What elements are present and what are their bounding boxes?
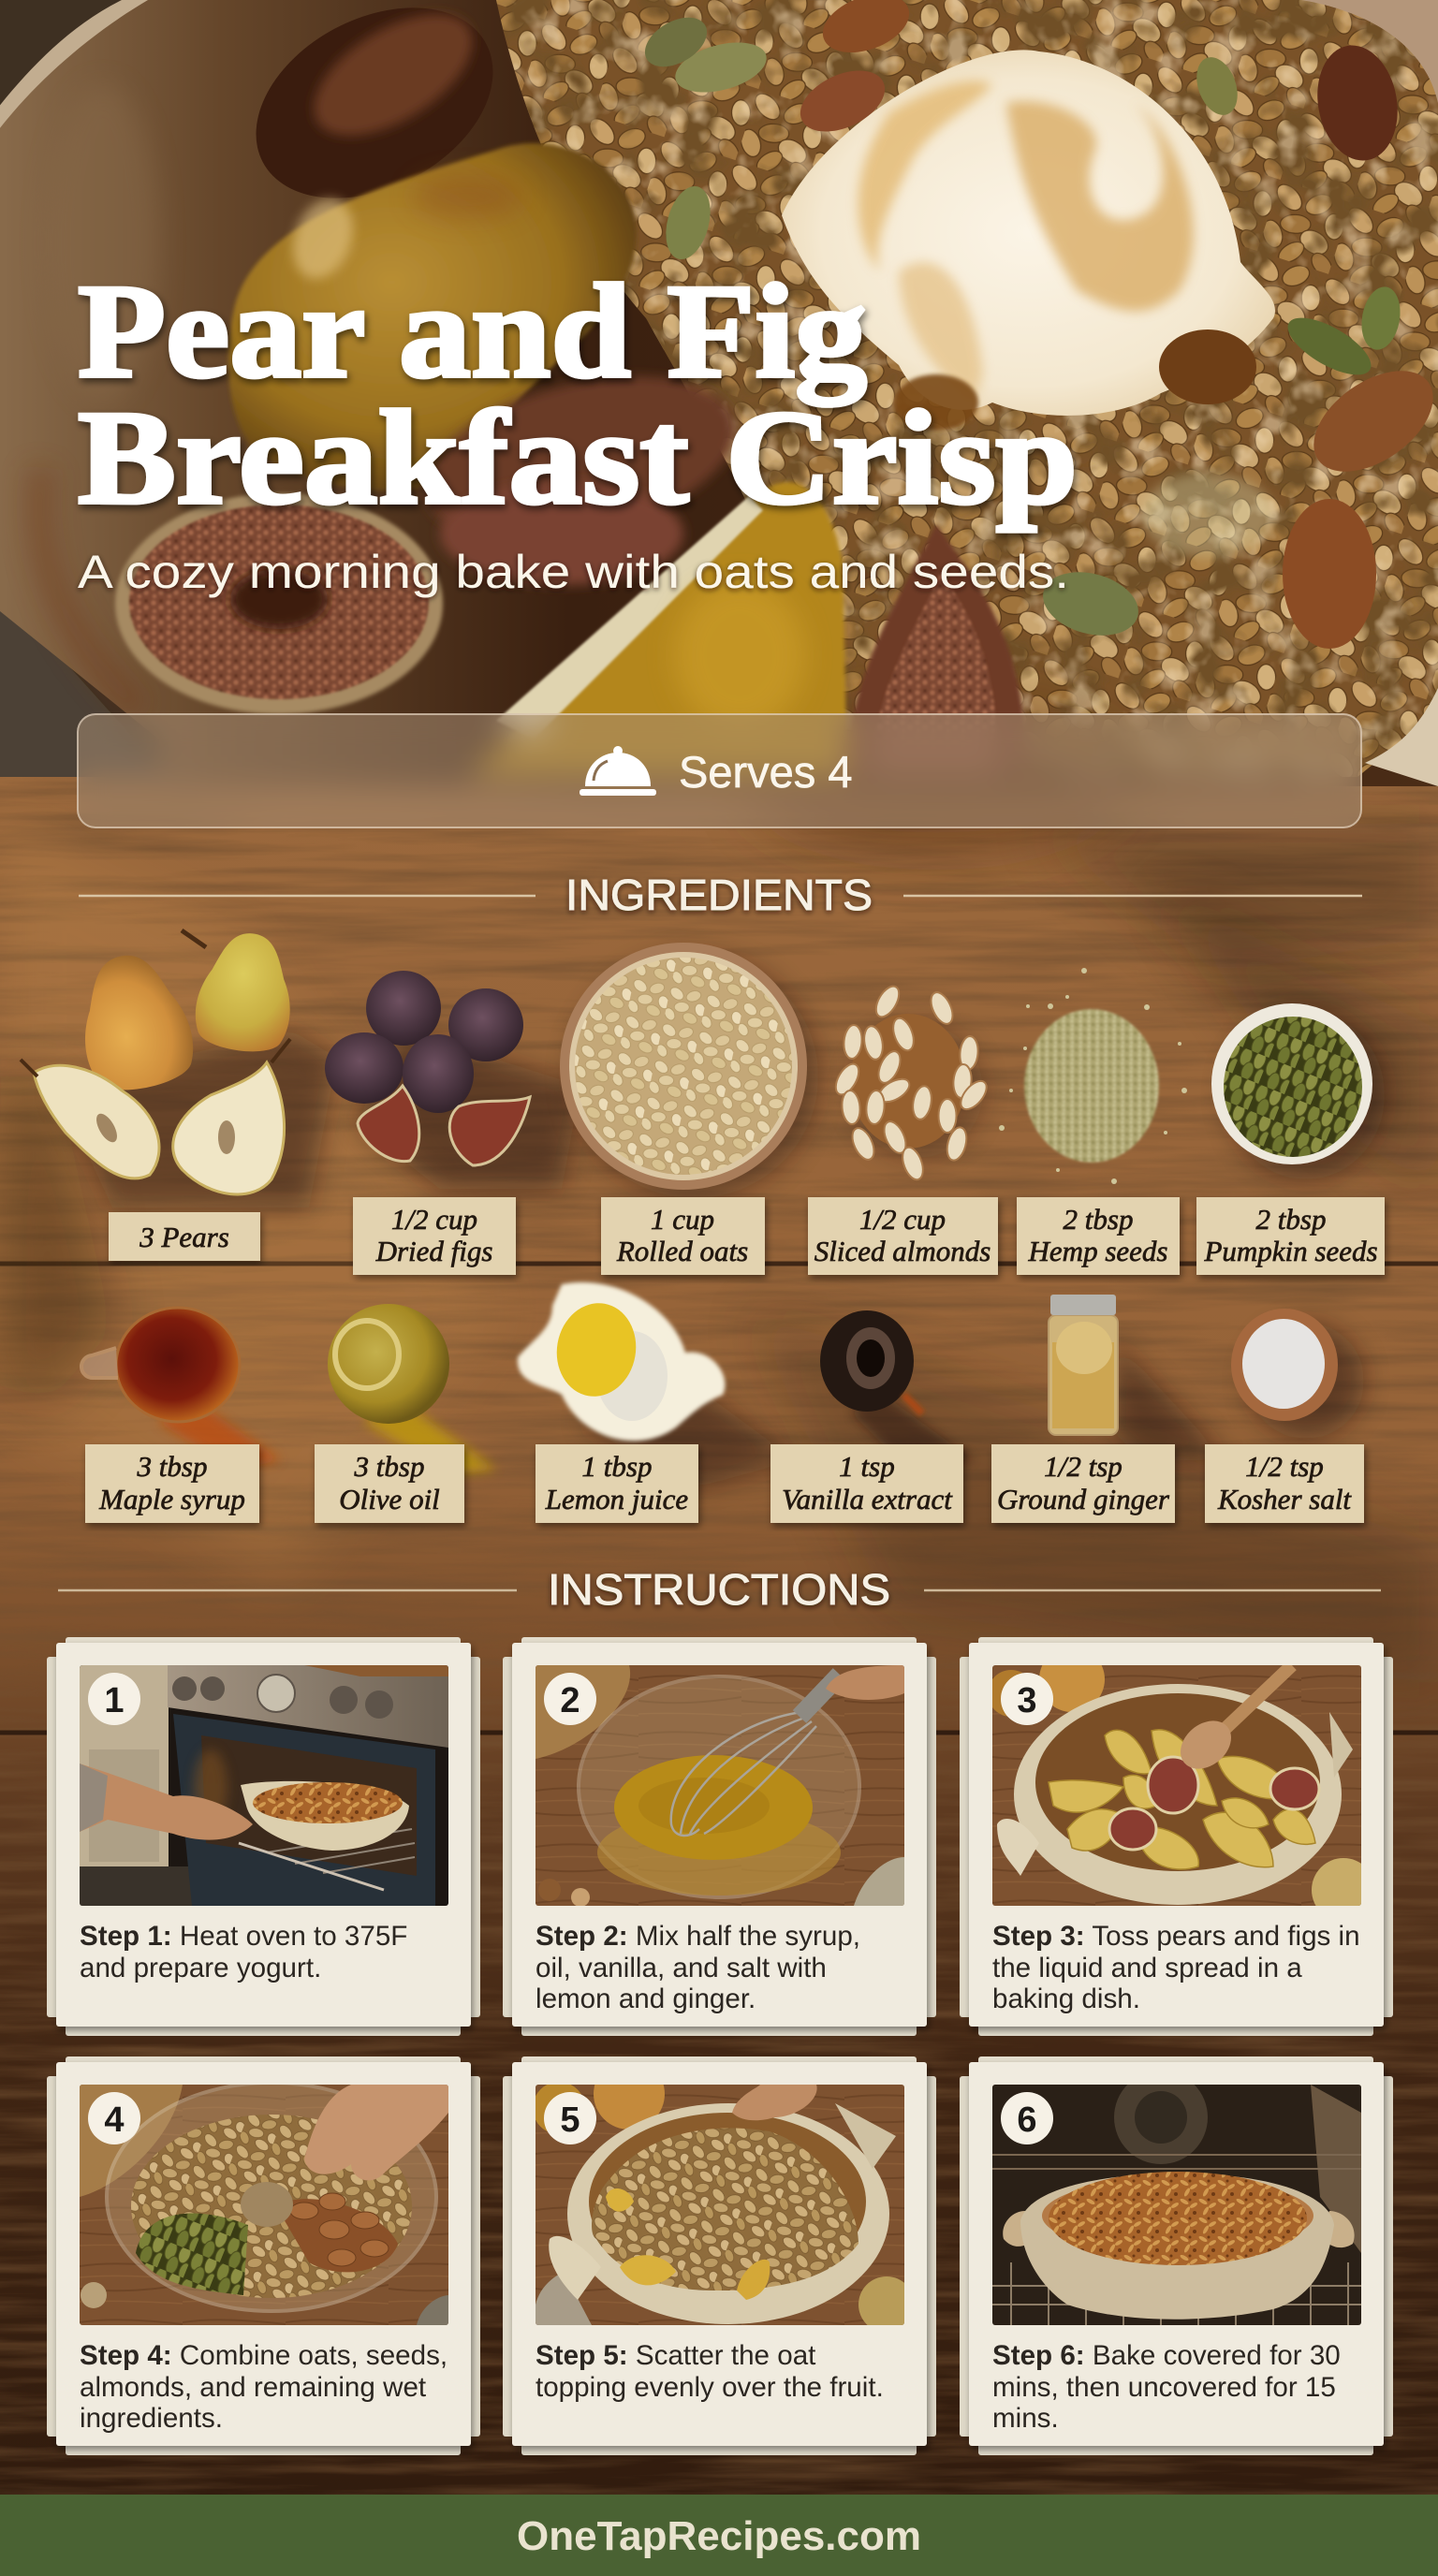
- icon: serving cloche: [580, 746, 656, 796]
- label: rolled oats: Rolled oats: [616, 1235, 748, 1267]
- ingredient: olive oil jug: [328, 1304, 496, 1474]
- step number badge 3: [1001, 1673, 1053, 1725]
- ingredient: pumpkin seeds bowl: [1211, 1003, 1385, 1179]
- step 1 text: Step 1:: [80, 1921, 172, 1952]
- ingredient: maple syrup jug: [81, 1308, 281, 1470]
- servings text: Serves 4: [679, 747, 852, 797]
- step 6 text: Step 6:: [992, 2340, 1085, 2371]
- step 1 text: and prepare yogurt.: [80, 1953, 321, 1983]
- label: 3 Pears: [109, 1212, 260, 1261]
- ingredient: kosher salt dish: [1231, 1309, 1364, 1439]
- label: pumpkin seeds: 2 tbsp: [1256, 1203, 1326, 1236]
- label: vanilla extract: [770, 1444, 963, 1523]
- step 2 text: lemon and ginger.: [536, 1983, 756, 2014]
- footer band: [0, 2495, 1438, 2576]
- step number badge 2: 2: [560, 1681, 580, 1720]
- step 6 photo: baking in oven: [992, 2071, 1361, 2325]
- label: sliced almonds: 1/2 cup: [859, 1203, 946, 1236]
- step number badge 3: 3: [1017, 1681, 1037, 1720]
- step card 1: [47, 1637, 480, 2036]
- step 4 text: Step 4:: [80, 2340, 172, 2371]
- title: [78, 257, 1078, 533]
- granola crust texture: [496, 0, 1438, 852]
- fig centre: [408, 347, 753, 570]
- fig upper left: [224, 0, 525, 237]
- label: hemp seeds: Hemp seeds: [1028, 1235, 1167, 1267]
- step 6 text: mins, then uncovered for 15: [992, 2372, 1336, 2403]
- label: olive oil: 3 tbsp: [354, 1450, 424, 1483]
- section heading: ingredients: INGREDIENTS: [565, 871, 873, 919]
- hero photo: crisp in bowl: [0, 0, 1438, 852]
- label: rolled oats: [601, 1197, 765, 1275]
- step 5 text: Scatter the oat: [636, 2340, 815, 2371]
- step 3 text: baking dish.: [992, 1983, 1140, 2014]
- label: hemp seeds: [1017, 1197, 1180, 1275]
- step 4 text: ingredients.: [80, 2403, 223, 2434]
- ingredient: lemon juice and reamer: [518, 1282, 796, 1488]
- almonds and pumpkin seeds: [637, 0, 1438, 649]
- ingredient: hemp seeds: [999, 968, 1187, 1184]
- step 2 photo: whisking: [536, 1665, 904, 1907]
- step 1 photo: oven: [80, 1665, 448, 1906]
- step 4 text: Combine oats, seeds,: [180, 2340, 448, 2371]
- label: kosher salt: Kosher salt: [1217, 1483, 1352, 1515]
- step number badge 4: 4: [104, 2100, 125, 2140]
- title: Pear and Fig: [78, 257, 867, 406]
- poached pear: [228, 143, 637, 490]
- step 2 text: oil, vanilla, and salt with: [536, 1953, 827, 1983]
- step number badge 6: [1001, 2092, 1053, 2144]
- step card 6: [960, 2056, 1393, 2455]
- label: sliced almonds: Sliced almonds: [814, 1235, 990, 1267]
- label: dried figs: 1/2 cup: [391, 1203, 477, 1236]
- pear wedge: [468, 482, 847, 777]
- section heading: instructions: INSTRUCTIONS: [548, 1565, 890, 1614]
- label: olive oil: [315, 1444, 464, 1523]
- step 4 photo: dry mix bowl: [80, 2083, 448, 2325]
- step 2 text: Mix half the syrup,: [636, 1921, 860, 1952]
- label: vanilla extract: 1 tsp: [839, 1450, 895, 1483]
- label: hemp seeds: 2 tbsp: [1064, 1203, 1133, 1236]
- label: pumpkin seeds: [1196, 1197, 1385, 1275]
- subtitle: A cozy morning bake with oats and seeds.: [78, 546, 1069, 598]
- fig lower right: [847, 524, 1025, 777]
- label: kosher salt: [1205, 1444, 1364, 1523]
- label: ground ginger: 1/2 tsp: [1044, 1450, 1123, 1483]
- step 6 text: Bake covered for 30: [1093, 2340, 1341, 2371]
- label: ground ginger: [991, 1444, 1175, 1523]
- step 3 text: Toss pears and figs in: [1092, 1921, 1360, 1952]
- label: maple syrup: [85, 1444, 259, 1523]
- label: lemon juice: 1 tbsp: [582, 1450, 652, 1483]
- step 3 photo: pears in dish: [992, 1665, 1361, 1906]
- label: ground ginger: Ground ginger: [997, 1483, 1170, 1515]
- step number badge 2: [544, 1673, 596, 1725]
- label: dried figs: [353, 1197, 516, 1275]
- step 3 text: Step 3:: [992, 1921, 1085, 1952]
- label: dried figs: Dried figs: [375, 1235, 492, 1267]
- label: sliced almonds: [808, 1197, 998, 1275]
- step number badge 5: [544, 2092, 596, 2144]
- yogurt scoop with syrup: [782, 50, 1275, 431]
- label: maple syrup: 3 tbsp: [137, 1450, 207, 1483]
- step 1 text: Heat oven to 375F: [180, 1921, 407, 1952]
- step card 5: [503, 2056, 936, 2455]
- footer band: OneTapRecipes.com: [517, 2513, 921, 2559]
- label: maple syrup: Maple syrup: [98, 1483, 245, 1515]
- step number badge 4: [88, 2092, 140, 2144]
- label: 3 Pears: 3 Pears: [139, 1221, 229, 1253]
- label: vanilla extract: Vanilla extract: [782, 1483, 953, 1515]
- step card 3: [960, 1637, 1393, 2036]
- label: olive oil: Olive oil: [339, 1483, 440, 1515]
- ingredient: pears: [21, 928, 337, 1208]
- ingredient: ground ginger jar: [1049, 1295, 1226, 1460]
- label: pumpkin seeds: Pumpkin seeds: [1203, 1235, 1378, 1267]
- step number badge 5: 5: [560, 2100, 580, 2140]
- ingredient: vanilla extract bottle: [820, 1310, 974, 1470]
- title: Breakfast Crisp: [78, 384, 1078, 533]
- label: kosher salt: 1/2 tsp: [1245, 1450, 1324, 1483]
- step 5 text: topping evenly over the fruit.: [536, 2372, 884, 2403]
- serves bar: [77, 713, 1362, 828]
- ingredient: sliced almonds: [831, 983, 991, 1182]
- label: lemon juice: [536, 1444, 698, 1523]
- step number badge 1: 1: [104, 1681, 125, 1720]
- step 5 photo: oat topping: [536, 2085, 904, 2325]
- wood table background: [0, 749, 1438, 2576]
- step number badge 1: [88, 1673, 140, 1725]
- step 3 text: the liquid and spread in a: [992, 1953, 1302, 1983]
- step number badge 6: 6: [1017, 2100, 1037, 2140]
- label: rolled oats: 1 cup: [651, 1203, 714, 1236]
- step 2 text: Step 2:: [536, 1921, 628, 1952]
- ingredient: figs: [325, 971, 580, 1189]
- ingredient: rolled oats bowl: [560, 943, 818, 1198]
- step card 2: [503, 1637, 936, 2036]
- fig lower left: [115, 493, 443, 714]
- step 6 text: mins.: [992, 2403, 1059, 2434]
- step 4 text: almonds, and remaining wet: [80, 2372, 426, 2403]
- step 5 text: Step 5:: [536, 2340, 628, 2371]
- label: lemon juice: Lemon juice: [545, 1483, 688, 1515]
- step card 4: [47, 2056, 480, 2455]
